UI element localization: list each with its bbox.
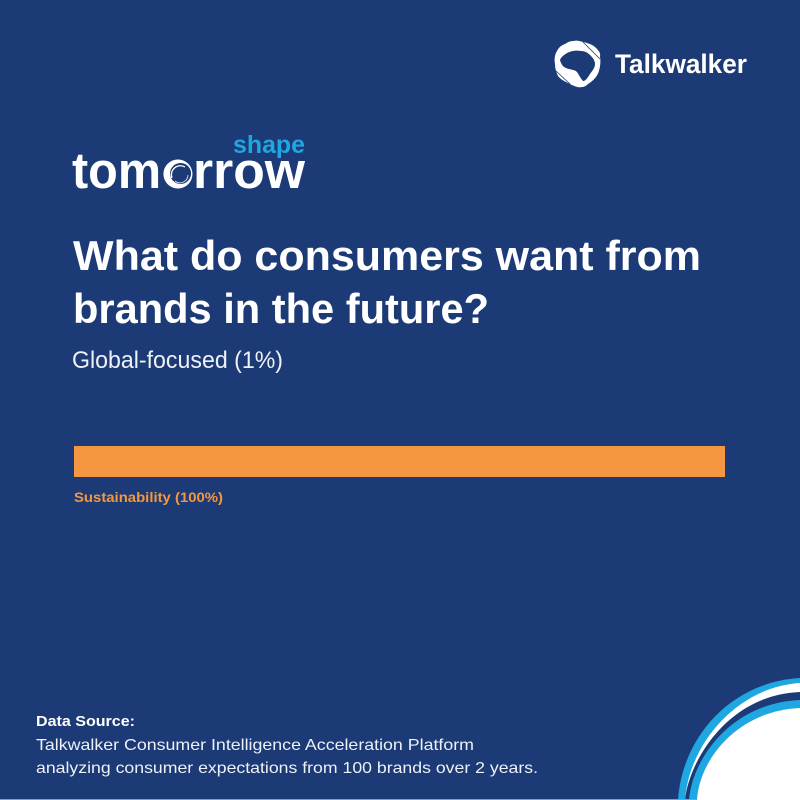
title line 2: brands in the future? [73, 285, 489, 332]
Talkwalker logo [555, 41, 747, 87]
word: rrow: rrow [193, 142, 305, 199]
bar: sustainability [74, 446, 725, 477]
corner arcs [678, 678, 800, 800]
bar label: Sustainability (100%) [74, 489, 223, 505]
icon: swirl letter o [163, 160, 192, 188]
title line 1: What do consumers want from [73, 232, 701, 279]
bar chart [74, 446, 725, 505]
icon: Talkwalker emblem [555, 41, 600, 87]
data source line 2: analyzing consumer expectations from 100 brands over 2 years. [36, 760, 538, 777]
data source line 1: Talkwalker Consumer Intelligence Acceleration Platform [36, 737, 474, 754]
title [73, 232, 701, 332]
subtitle: Global-focused (1%) [72, 347, 283, 374]
data source heading: Data Source: [36, 713, 135, 730]
logo wordmark: Talkwalker [615, 49, 747, 79]
shape tomorrow logo [72, 131, 305, 199]
word: tom: tom [72, 142, 161, 199]
word: shape: shape [233, 131, 305, 159]
data source [36, 713, 538, 777]
